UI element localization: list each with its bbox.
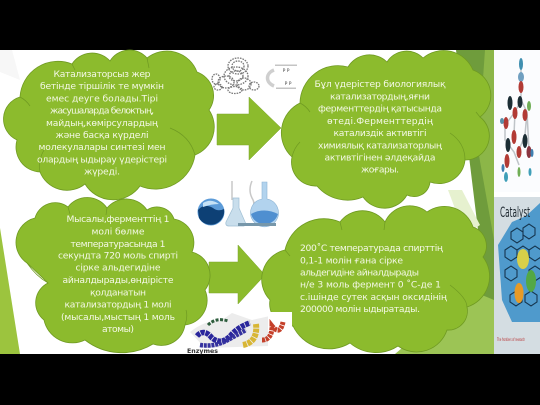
image: enzyme reaction diagram: P P — [285, 81, 292, 87]
arrow: bottom — [209, 245, 265, 304]
text block: және басқа күрделі — [56, 130, 148, 141]
panel: cloud bottom left — [16, 197, 210, 353]
panel: cloud bottom right — [262, 206, 490, 353]
text block: химиялық катализаторлың — [318, 140, 443, 152]
text block: с.ішінде сутек асқын оксидінің — [300, 292, 448, 303]
text block: катализатордың,яғни — [330, 92, 430, 102]
image: Catalyst magazine cover — [494, 197, 540, 354]
text block — [37, 69, 167, 178]
text block — [58, 214, 178, 335]
text block: молекулалары синтезі мен — [38, 142, 166, 153]
text block — [314, 79, 446, 176]
text block: айналдырады,өндірісте — [62, 275, 174, 286]
text block: 0,1-1 молін ғана сірке — [300, 256, 403, 266]
text block: молі бөлме — [92, 226, 145, 238]
text block: олардың ыдырау үдерістері — [37, 154, 167, 166]
panel: cloud top left — [4, 50, 214, 200]
image: enzyme ribbon structures: Enzymes — [187, 347, 218, 355]
text block: (мысалы,мыстың 1 моль — [61, 312, 175, 323]
text block: атомы) — [102, 324, 134, 335]
text block: Катализаторсыз жер — [54, 69, 151, 80]
image: molecule model — [494, 50, 540, 192]
text block: сірке альдегидіне — [76, 262, 161, 274]
text block: бетінде тіршілік те мүмкін — [40, 81, 164, 92]
text block: катализдік активтігі — [334, 128, 426, 139]
text block — [300, 243, 448, 315]
text block: жасушаларда белоктың, — [50, 106, 154, 116]
text block: майдың,көмірсулардың — [46, 118, 159, 129]
image: enzyme ribbon structures — [187, 313, 270, 355]
text block: қолданатын — [90, 288, 146, 298]
text block: 200˚С температурада спирттің — [300, 243, 444, 254]
text block: активтігінен әлдеқайда — [324, 152, 436, 164]
image: laboratory flasks — [198, 181, 278, 227]
text block: жоғары. — [361, 164, 399, 176]
text block: ферменттердің қатысында — [318, 104, 442, 114]
text block: жүреді. — [84, 166, 120, 178]
text block: н/е 3 моль фермент 0 ˚С-де 1 — [300, 280, 441, 290]
image: enzyme reaction diagram: P P — [283, 68, 290, 74]
panel: cloud top right — [281, 51, 491, 208]
text block: Бұл үдерістер биологиялық — [314, 79, 446, 90]
image: red protein ribbon — [262, 312, 292, 350]
text block: температурасында 1 — [70, 239, 166, 250]
text block: катализатордың 1 молі — [64, 300, 172, 310]
text block: Мысалы,ферменттің 1 — [66, 214, 170, 225]
text block: 200000 молін ыдыратады. — [300, 304, 420, 315]
text block: секундта 720 моль спирті — [58, 250, 178, 262]
text block: альдегидіне айналдырады — [300, 268, 419, 278]
text block: емес деуге болады.Тірі — [46, 94, 158, 104]
image: protein ball model — [212, 58, 259, 94]
text block: өтеді.Ферменттердің — [327, 116, 434, 127]
image: enzyme reaction diagram — [267, 64, 297, 89]
arrow: top — [217, 97, 281, 160]
